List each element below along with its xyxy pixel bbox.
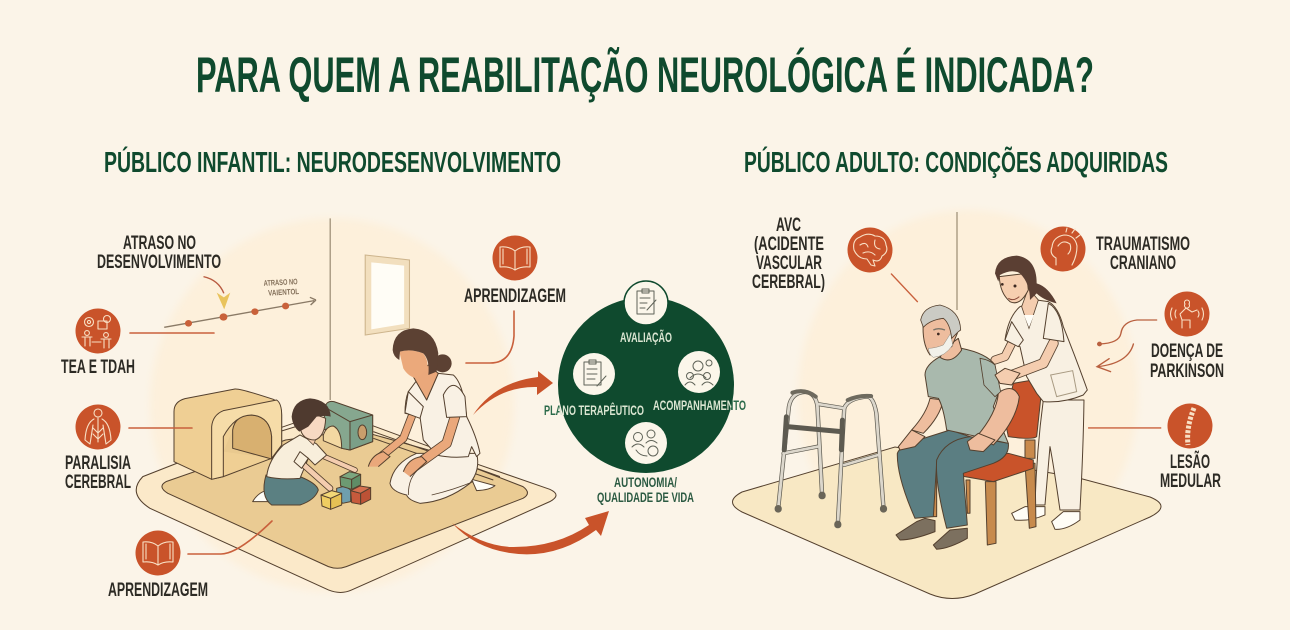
- step: acompanhamento label: ACOMPANHAMENTO: [653, 398, 746, 413]
- green block: [323, 401, 373, 450]
- icon: head trauma: [1040, 226, 1086, 272]
- label: paralisia cerebral: CEREBRAL: [65, 471, 131, 493]
- connector: avc: [891, 274, 917, 302]
- label: paralisia cerebral: [65, 452, 131, 493]
- panel: adult therapy scene: [732, 210, 1224, 598]
- icon: parkinson: [1164, 292, 1210, 336]
- label: doença de parkinson: DOENÇA DE: [1151, 340, 1223, 362]
- chair: [929, 379, 1042, 517]
- label: atraso no desenvolvimento: DESENVOLVIMENTO: [97, 251, 221, 273]
- label: aprendizagem top: APRENDIZAGEM: [464, 285, 566, 307]
- timeline arrow: [164, 277, 316, 327]
- arrow: to circle top: [473, 371, 553, 415]
- foam tunnel: [174, 389, 282, 479]
- label: avc: CEREBRAL): [752, 271, 825, 293]
- heading: público infantil: PÚBLICO INFANTIL: NEURODESENVOLVIMENTO: [104, 145, 561, 179]
- nurse arm and head: [995, 256, 1064, 385]
- connector: tea: [130, 332, 214, 334]
- icon: paralisia cerebral: [76, 404, 120, 450]
- timeline small label: [263, 277, 299, 298]
- nurse: [995, 288, 1087, 529]
- step: autonomia label: AUTONOMIA/: [614, 475, 677, 490]
- therapist: [368, 328, 495, 503]
- timeline small label: ATRASO NO: [263, 277, 298, 288]
- label: avc: AVC: [776, 214, 801, 236]
- panel: care cycle circle: [544, 281, 746, 505]
- floor: [732, 447, 1161, 598]
- label: lesão medular: [1160, 450, 1221, 492]
- step: avaliação label: AVALIAÇÃO: [620, 330, 672, 345]
- elderly man: [896, 305, 1019, 549]
- step: autonomia label: QUALIDADE DE VIDA: [597, 490, 694, 505]
- label: tea e tdah: TEA E TDAH: [61, 356, 135, 378]
- label: atraso no desenvolvimento: ATRASO NO: [123, 232, 196, 254]
- label: doença de parkinson: [1150, 340, 1224, 382]
- connector: aprendizagem inferior: [188, 521, 272, 554]
- label: lesão medular: MEDULAR: [1160, 470, 1221, 492]
- window: [365, 255, 409, 335]
- icon: tea e tdah: [76, 308, 120, 354]
- baseboard: [282, 423, 500, 480]
- seat and front legs: [927, 453, 1036, 545]
- play mat: [162, 430, 527, 568]
- step: plano label: PLANO TERAPÊUTICO: [544, 403, 644, 418]
- icon: book top: [492, 236, 538, 280]
- panel: child therapy scene: [61, 218, 566, 601]
- label: lesão medular: LESÃO: [1170, 450, 1210, 473]
- timeline small label: VAIENTOL: [268, 287, 299, 298]
- label: doença de parkinson: PARKINSON: [1150, 360, 1224, 382]
- icon: book bottom: [136, 530, 180, 576]
- connector: lesão: [1088, 426, 1161, 430]
- toy blocks: [321, 472, 371, 509]
- step: acompanhamento icon: [678, 351, 720, 393]
- label: avc: (ACIDENTE: [754, 233, 824, 255]
- wall corner: [956, 212, 958, 310]
- arrow: to circle bottom: [452, 511, 609, 554]
- icon: spine: [1168, 404, 1212, 448]
- step: avaliação icon: [624, 281, 668, 325]
- step: autonomia icon: [625, 422, 667, 464]
- label: traumatismo craniano: [1096, 233, 1190, 274]
- child: [253, 398, 355, 505]
- label: avc: [752, 214, 825, 293]
- connector: paralisia: [129, 427, 192, 429]
- wall corner: [328, 218, 332, 400]
- label: traumatismo craniano: CRANIANO: [1110, 252, 1176, 274]
- label: paralisia cerebral: PARALISIA: [65, 452, 131, 474]
- icon: brain: [848, 228, 892, 272]
- connector: aprendizagem superior: [466, 311, 514, 363]
- step: plano icon: [573, 353, 615, 395]
- label: atraso no desenvolvimento: [97, 232, 221, 273]
- label: avc: VASCULAR: [756, 252, 822, 274]
- walker: [778, 391, 884, 525]
- connector: parkinson: [1097, 320, 1157, 372]
- label: traumatismo craniano: TRAUMATISMO: [1096, 233, 1190, 255]
- label: aprendizagem bottom: APRENDIZAGEM: [108, 579, 208, 601]
- step: autonomia label: [597, 475, 694, 505]
- floor rug: [136, 413, 556, 592]
